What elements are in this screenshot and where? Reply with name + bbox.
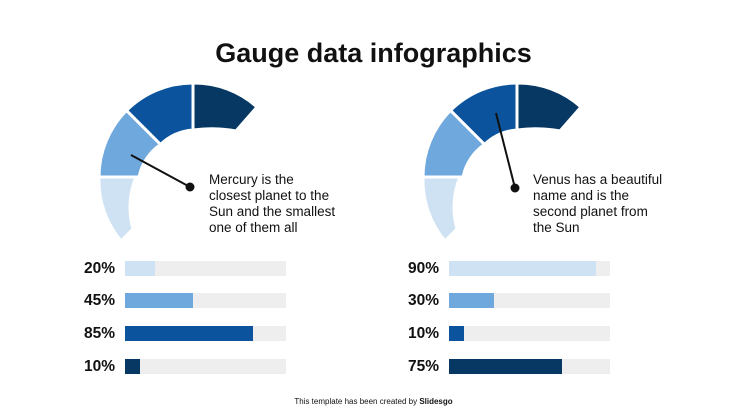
title: Gauge data infographics bbox=[215, 38, 532, 68]
text: 10% bbox=[408, 325, 439, 342]
text: mercury: closest planet to the bbox=[209, 188, 329, 203]
text: 90% bbox=[408, 260, 439, 277]
text: venus: Venus has a beautiful bbox=[533, 172, 662, 187]
text: mercury: Mercury is the bbox=[209, 172, 294, 187]
footer: This template has been created by Slidesgo bbox=[294, 397, 453, 406]
text: mercury bbox=[209, 172, 336, 235]
text: venus: name and is the bbox=[533, 188, 629, 203]
text: venus: the Sun bbox=[533, 220, 580, 235]
needle right bbox=[496, 113, 520, 192]
bars right bbox=[408, 260, 610, 375]
text: 45% bbox=[84, 292, 115, 309]
text: 10% bbox=[84, 358, 115, 375]
text: venus: second planet from bbox=[533, 204, 648, 219]
text: 20% bbox=[84, 260, 115, 277]
text: 85% bbox=[84, 325, 115, 342]
bars left bbox=[84, 260, 286, 375]
text: venus bbox=[533, 172, 662, 235]
needle left bbox=[131, 155, 194, 192]
text: mercury: Sun and the smallest bbox=[209, 204, 335, 219]
text: mercury: one of them all bbox=[209, 220, 298, 235]
gauge left segments bbox=[99, 83, 257, 241]
text: 75% bbox=[408, 358, 439, 375]
gauge right segments bbox=[423, 83, 581, 241]
gauges bbox=[100, 84, 579, 239]
text: 30% bbox=[408, 292, 439, 309]
